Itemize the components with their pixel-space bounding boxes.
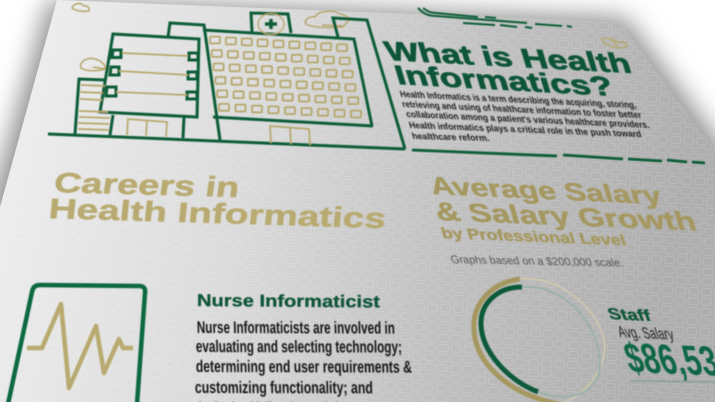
dashed divider [412, 150, 705, 163]
heading: Careers in Health Informatics: Health Informatics [47, 193, 387, 234]
heading: Average Salary and Salary Growth: by Professional Level [439, 225, 628, 249]
career description: customizing functionality; and [195, 378, 373, 397]
building outline [48, 13, 405, 149]
intro text block: retrieving and using of healthcare information to foster better [401, 99, 643, 120]
heading: Careers in Health Informatics: Careers in [52, 167, 241, 203]
intro text block: collaboration among a patient's various healthcare providers. [405, 109, 651, 130]
title: What is Health Informatics?: What is Health [381, 36, 635, 79]
heading: Average Salary and Salary Growth: Average Salary [427, 172, 666, 210]
icon: ECG monitor [8, 285, 145, 402]
scale note: Graphs based on a $200,000 scale. [449, 254, 625, 269]
heading: Careers in Health Informatics [47, 167, 387, 234]
hospital building illustration [48, 4, 705, 163]
career description [195, 318, 412, 402]
icon: hospital cross sign [258, 14, 284, 34]
intro text block: Health informatics plays a critical role in the push toward [408, 120, 643, 139]
heading: Average Salary and Salary Growth [427, 172, 700, 249]
staff label: Staff [605, 305, 654, 325]
career description: Nurse Informaticists are involved in [197, 318, 395, 338]
career description: determining end user requirements & [196, 357, 412, 377]
intro text block [399, 89, 651, 143]
career heading: Nurse Informaticist [197, 291, 380, 311]
intro text block: Health Informatics is a term describing the acquiring, storing, [399, 89, 638, 110]
top decorative green lines [418, 8, 572, 28]
title: What is Health Informatics?: Informatics? [391, 60, 617, 102]
average salary label: Avg. Salary [615, 323, 677, 344]
intro text block: healthcare reform. [411, 131, 491, 143]
salary underline [630, 381, 715, 382]
gold building details [78, 53, 310, 145]
career: Nurse Informaticist [195, 291, 412, 402]
title: What is Health Informatics? [381, 36, 635, 102]
heading: Average Salary and Salary Growth: & Salary Growth [431, 197, 700, 236]
salary ring chart [474, 279, 605, 402]
icon: clouds [72, 4, 627, 71]
staff salary stat [605, 305, 715, 386]
windows grid [210, 37, 361, 117]
career description: evaluating and selecting technology; [196, 337, 402, 357]
